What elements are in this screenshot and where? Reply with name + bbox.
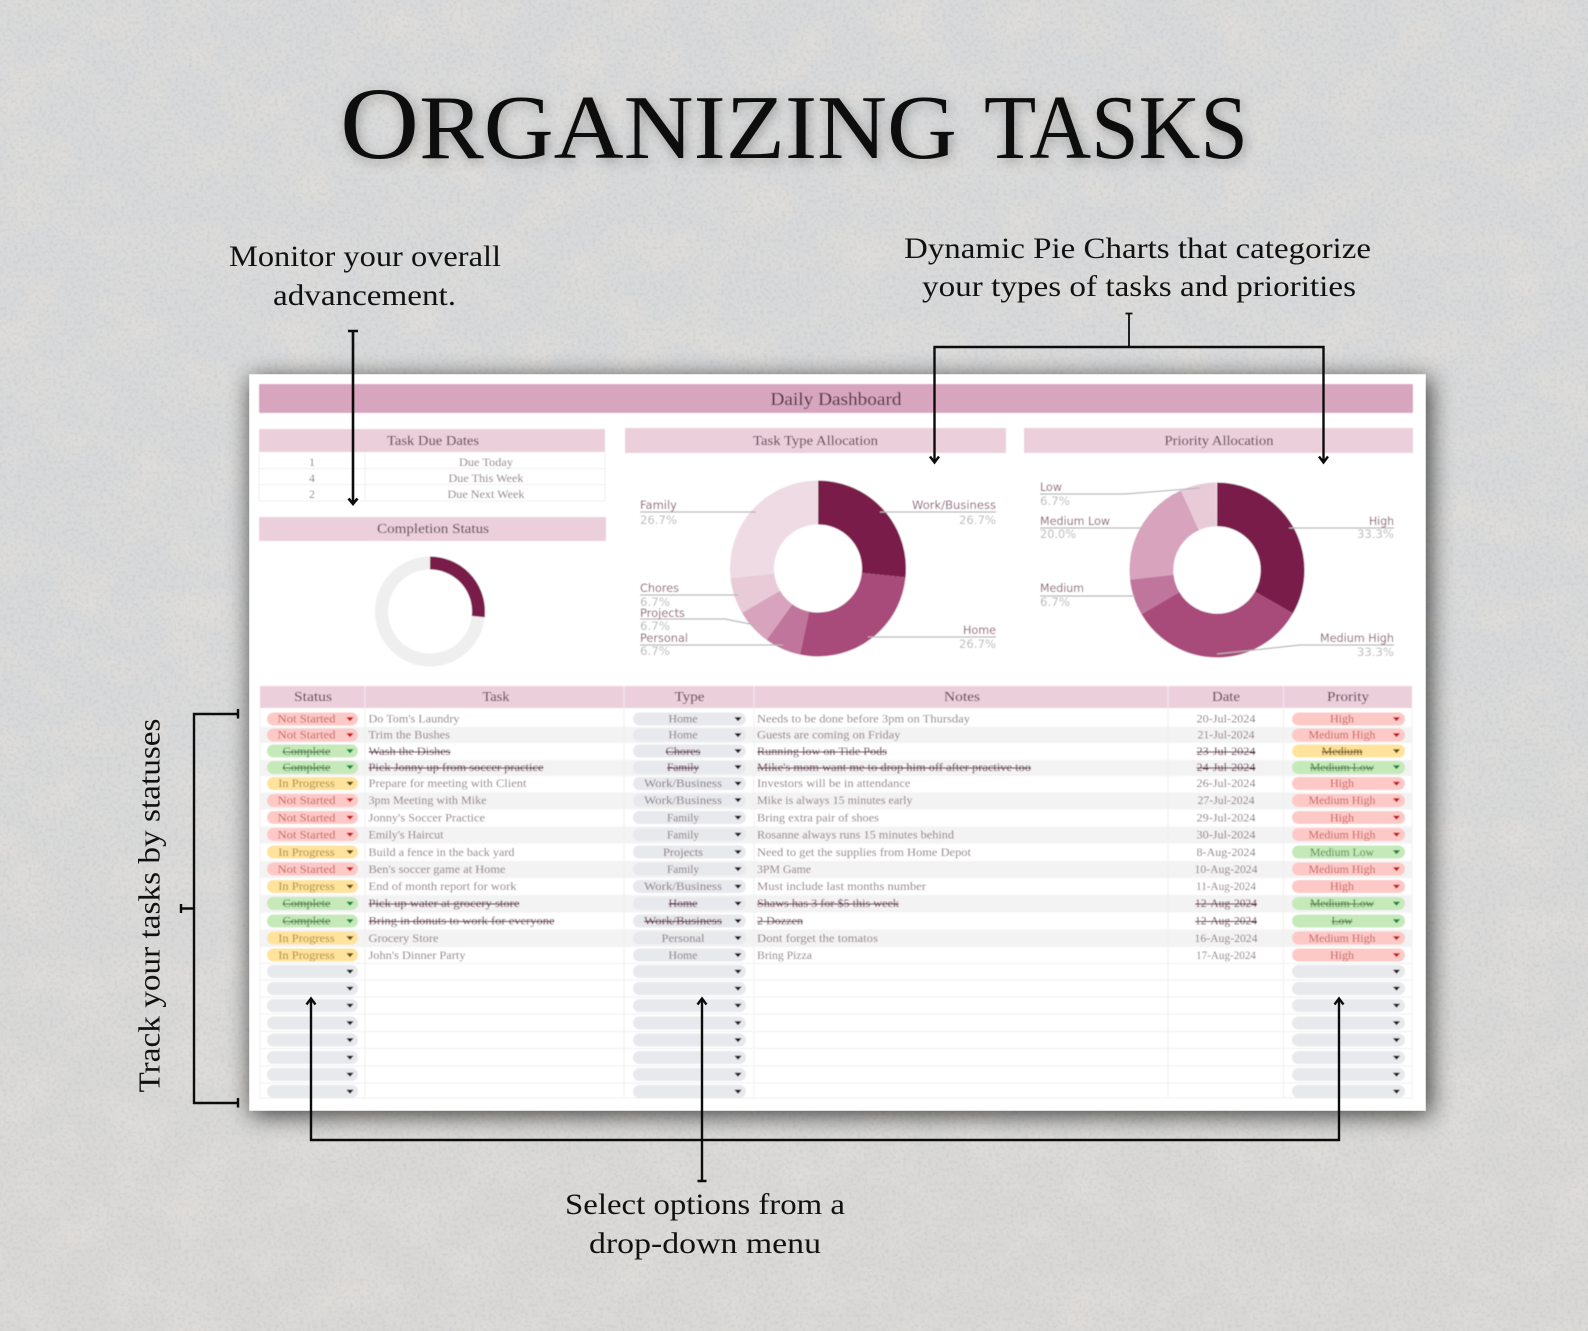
table row 6: Medium High — [1308, 795, 1376, 807]
panel: task type allocation — [625, 428, 1006, 658]
annotation: dynamic pie charts: your types of tasks and priorities — [922, 270, 1356, 303]
table row 14: Medium High — [1308, 933, 1376, 945]
table row 6: 27-Jul-2024 — [1198, 795, 1255, 807]
chart labels: task types: 6.7% — [640, 619, 670, 633]
chart labels: task types: Family — [640, 498, 677, 512]
table row 4 — [267, 761, 1405, 774]
table row 3: Wash the Dishes — [368, 746, 451, 758]
table row 3: Running low on Tide Pods — [757, 746, 888, 758]
table row 11: Work/Business — [644, 881, 723, 893]
table row 9: Build a fence in the back yard — [368, 847, 515, 859]
table row 12 — [267, 897, 1405, 910]
table row 12: Complete — [282, 898, 330, 910]
panel: task due dates: 1 — [309, 457, 315, 469]
chart labels: task types: 26.7% — [640, 513, 677, 527]
table row 7: Jonny's Soccer Practice — [368, 812, 485, 824]
table row 6: Not Started — [278, 795, 336, 807]
panel: completion status — [259, 517, 606, 660]
table row 8: Rosanne always runs 15 minutes behind — [757, 830, 954, 842]
card shadow — [251, 378, 1430, 1115]
table row 9 — [267, 846, 1405, 859]
table row 4: Family — [667, 762, 699, 774]
table row 3: Complete — [282, 746, 330, 758]
table header: Prority — [1327, 690, 1369, 705]
table header: Notes — [944, 690, 980, 705]
table row 8 — [267, 828, 1405, 842]
table row 2: Not Started — [278, 730, 336, 742]
table row 4: Medium Low — [1310, 762, 1375, 774]
table row 11: In Progress — [278, 881, 335, 893]
panel: task due dates: 2 — [309, 489, 315, 501]
table row 15: High — [1330, 950, 1354, 962]
annotation: select options: drop-down menu — [589, 1227, 821, 1260]
table row 9: Projects — [663, 847, 704, 859]
table row 15: John's Dinner Party — [368, 950, 466, 962]
table row 2: Home — [668, 730, 698, 742]
table row 12: 12-Aug-2024 — [1195, 898, 1257, 910]
arrows: pie chart bracket — [930, 313, 1328, 462]
table row 12: Shaws has 3 for $5 this week — [757, 897, 899, 910]
table row 15: 17-Aug-2024 — [1196, 950, 1256, 962]
dashboard heading — [259, 384, 1413, 413]
table row 3: Medium — [1322, 746, 1363, 758]
table row 7 — [267, 811, 1405, 824]
table row 6: Work/Business — [644, 795, 723, 807]
chart labels: task types: Chores — [640, 581, 679, 595]
table row 7: Bring extra pair of shoes — [757, 812, 880, 824]
chart labels: task types: 6.7% — [640, 595, 670, 609]
table row 5: High — [1330, 778, 1354, 790]
chart labels: priorities: 6.7% — [1040, 494, 1070, 508]
annotation: dynamic pie charts: Dynamic Pie Charts that categorize — [904, 232, 1371, 265]
table row 10: 3PM Game — [757, 864, 811, 876]
empty drop-down rows — [267, 965, 1405, 1098]
annotation: monitor advancement: advancement. — [273, 279, 456, 312]
table row 1: Needs to be done before 3pm on Thursday — [757, 714, 970, 726]
table row 5 — [267, 777, 1405, 790]
panel: task due dates: 4 — [309, 473, 315, 485]
table row 1: Home — [668, 714, 698, 726]
table row 13 — [267, 914, 1405, 928]
arrow: monitor to completion status — [348, 331, 358, 504]
table row 2: Guests are coming on Friday — [757, 730, 901, 742]
table row 5: 26-Jul-2024 — [1196, 778, 1256, 790]
table row 15: In Progress — [278, 950, 335, 962]
chart labels: priorities: 33.3% — [1357, 645, 1394, 659]
table row 12: Home — [668, 898, 698, 910]
dashboard card — [249, 374, 1426, 1111]
table row 9: Medium Low — [1310, 847, 1375, 859]
table row 11: Must include last months number — [757, 881, 926, 893]
table row 8: Family — [667, 830, 699, 842]
table row 10: 10-Aug-2024 — [1194, 864, 1258, 876]
table row 12: Medium Low — [1310, 898, 1375, 910]
donut chart: priorities — [1151, 504, 1283, 636]
table row 14: Grocery Store — [368, 933, 438, 945]
table row 5: Investors will be in attendance — [757, 778, 910, 790]
table row 3: Chores — [666, 746, 701, 758]
table row 11: End of month report for work — [368, 881, 517, 893]
table row 9: Need to get the supplies from Home Depot — [757, 847, 972, 859]
panel: completion status: Completion Status — [377, 522, 489, 537]
chart labels: task types: 6.7% — [640, 644, 670, 658]
arrows: drop-down menu bracket — [306, 998, 1344, 1181]
table row 8: 30-Jul-2024 — [1196, 830, 1256, 842]
chart labels: priorities: 6.7% — [1040, 595, 1070, 609]
table row 13: Low — [1332, 916, 1353, 928]
table row 1: 20-Jul-2024 — [1196, 714, 1256, 726]
dashboard heading: Daily Dashboard — [770, 389, 902, 409]
table row 1: Do Tom's Laundry — [368, 714, 460, 726]
table row 1: High — [1330, 714, 1354, 726]
chart labels: priorities: Medium Low — [1040, 514, 1110, 528]
table row 1: Not Started — [278, 714, 336, 726]
panel: task type allocation: Task Type Allocation — [753, 434, 878, 449]
table header: Type — [674, 690, 704, 705]
table row 14: In Progress — [278, 933, 335, 945]
table row 2: Trim the Bushes — [368, 730, 451, 742]
panel: priority allocation — [1024, 428, 1413, 659]
table row 10 — [267, 862, 1405, 876]
chart labels: priorities — [1040, 480, 1394, 659]
table row 4: 24-Jul-2024 — [1196, 762, 1256, 774]
table row 13: Bring in donuts to work for everyone — [368, 916, 554, 928]
table row 2: Medium High — [1308, 730, 1376, 742]
table row 11: High — [1330, 881, 1354, 893]
panel: task due dates: Task Due Dates — [387, 434, 479, 449]
title: TASKS — [984, 77, 1248, 178]
title — [340, 67, 1248, 181]
table row 10: Ben's soccer game at Home — [368, 864, 506, 876]
chart labels: priorities: Medium — [1040, 581, 1084, 595]
table row 15 — [267, 948, 1405, 962]
table row 2: 21-Jul-2024 — [1198, 730, 1255, 742]
chart labels: priorities: 33.3% — [1357, 527, 1394, 541]
table row 6: 3pm Meeting with Mike — [368, 795, 486, 807]
table row 13: 12-Aug-2024 — [1195, 916, 1257, 928]
table row 9: In Progress — [278, 847, 335, 859]
chart labels: task types: Work/Business — [912, 498, 996, 512]
annotation: monitor advancement: Monitor your overall — [229, 240, 501, 273]
table header: Date — [1212, 690, 1240, 705]
table row 3 — [267, 744, 1405, 758]
table row 8: Not Started — [278, 830, 336, 842]
table row 11 — [267, 880, 1405, 893]
annotation: track tasks by statuses: Track your tasks by statuses — [132, 718, 166, 1092]
chart labels: priorities: 20.0% — [1040, 527, 1076, 541]
table row 7: 29-Jul-2024 — [1196, 812, 1256, 824]
annotation: select options: Select options from a — [565, 1188, 845, 1221]
table header: Status — [294, 690, 332, 705]
table row 13: Complete — [282, 916, 330, 928]
table row 2 — [267, 728, 1405, 742]
table row 10: Medium High — [1308, 864, 1376, 876]
chart labels: task types — [640, 498, 996, 658]
table row 7: High — [1330, 812, 1354, 824]
table row 4: Mike's mom want me to drop him off after practive too — [757, 762, 1031, 774]
donut chart: task types — [752, 502, 884, 634]
table row 14: Dont forget the tomatos — [757, 933, 879, 945]
table row 3: 23-Jul-2024 — [1196, 746, 1256, 758]
chart labels: task types: Projects — [640, 606, 685, 620]
table grid and row shading — [260, 708, 1412, 1098]
table row 13: 2 Dozzen — [757, 916, 803, 928]
table row 6: Mike is always 15 minutes early — [757, 795, 913, 807]
table row 15: Bring Pizza — [757, 950, 812, 962]
chart labels: task types: Home — [963, 623, 996, 637]
table row 11: 11-Aug-2024 — [1196, 881, 1256, 893]
table row 15: Home — [668, 950, 698, 962]
table row 12: Pick up water at grocery store — [368, 898, 520, 910]
table row 14: Personal — [662, 933, 704, 945]
table row 1 — [267, 712, 1405, 726]
table row 4: Complete — [282, 762, 330, 774]
panel: task due dates: Due Next Week — [448, 489, 525, 501]
annotation: dynamic pie charts — [904, 232, 1371, 303]
table row 14: 16-Aug-2024 — [1194, 933, 1258, 945]
bracket: statuses — [181, 709, 238, 1108]
chart labels: priorities: Medium High — [1320, 631, 1394, 645]
table row 9: 8-Aug-2024 — [1196, 847, 1256, 859]
table row 5: Prepare for meeting with Client — [368, 778, 527, 790]
table row 6 — [267, 794, 1405, 807]
title: ORGANIZING — [340, 67, 957, 181]
panel: task due dates: Due This Week — [448, 473, 524, 485]
table row 5: Work/Business — [644, 778, 723, 790]
table row 14 — [267, 932, 1405, 945]
table row 7: Not Started — [278, 812, 336, 824]
table row 7: Family — [667, 812, 699, 824]
chart labels: task types: 26.7% — [959, 513, 996, 527]
chart labels: priorities: Low — [1040, 480, 1062, 494]
chart labels: task types: Personal — [640, 631, 688, 645]
table header — [260, 686, 1412, 708]
table row 8: Medium High — [1308, 830, 1376, 842]
table row 13: Work/Business — [644, 916, 723, 928]
table header: Task — [482, 690, 510, 705]
table row 10: Not Started — [278, 864, 336, 876]
annotation: select options — [565, 1188, 845, 1260]
table row 10: Family — [667, 864, 699, 876]
annotation: monitor advancement — [229, 240, 501, 312]
chart labels: task types: 26.7% — [959, 637, 996, 651]
chart labels: priorities: High — [1369, 514, 1394, 528]
panel: task due dates: Due Today — [459, 457, 513, 469]
panel: task due dates — [259, 429, 605, 501]
table row 4: Pick Jonny up from soccer practice — [368, 762, 544, 774]
table row 8: Emily's Haircut — [368, 830, 444, 842]
panel: priority allocation: Priority Allocation — [1164, 434, 1274, 449]
table row 5: In Progress — [278, 778, 335, 790]
